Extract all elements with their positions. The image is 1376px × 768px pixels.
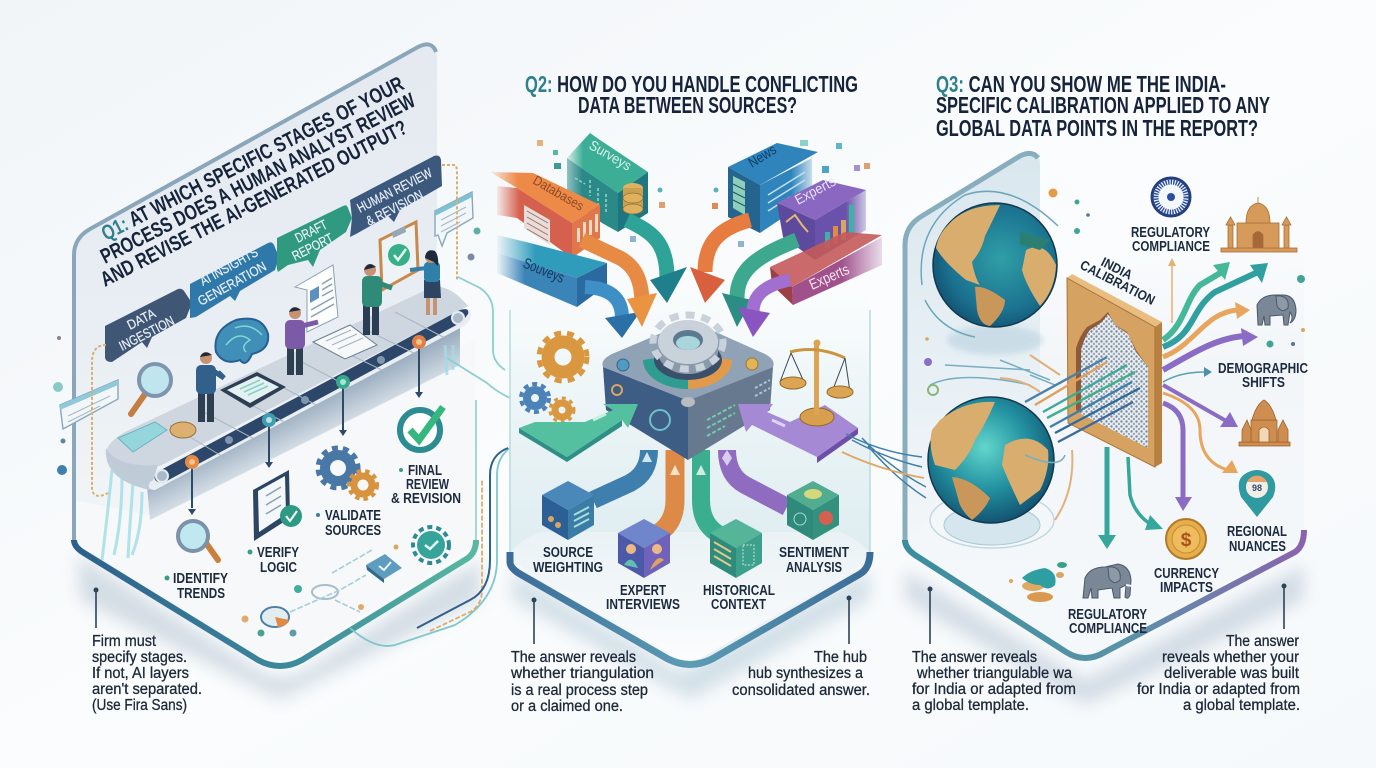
note: Q1: If not, AI layers (92, 665, 189, 682)
panel 2 wall (510, 290, 870, 658)
icon: dollar coin (1166, 519, 1206, 559)
icon: small orange gear (550, 398, 574, 422)
icon: elephant right (1257, 295, 1296, 325)
label: validate sources: VALIDATE (325, 508, 381, 524)
coin on belt (170, 422, 196, 438)
icon: verify checklist (253, 470, 302, 541)
icon: blue gear (521, 384, 549, 412)
side dots (53, 228, 480, 475)
label: regulatory compliance bottom: COMPLIANCE (1069, 621, 1147, 637)
icon: brain (215, 319, 268, 363)
icon: paper on belt (313, 325, 377, 359)
icon: coins and map (1022, 562, 1067, 602)
label: validate sources: SOURCES (325, 523, 381, 539)
stage tag: data ingestion (105, 289, 192, 362)
hub: synthesiser (602, 315, 774, 460)
note: Q1: specify stages. (92, 649, 187, 666)
source bar: souveys (497, 235, 607, 307)
teal circuit line (350, 442, 520, 646)
source bar: experts (770, 232, 882, 305)
hub gear (653, 315, 723, 374)
stage tag: AI insights generation: GENERATION (195, 259, 269, 309)
note: Q3 left (912, 649, 1076, 714)
panel 1 edge (74, 44, 436, 540)
note: Q2 left: The answer reveals (511, 649, 636, 666)
note: Q1: Firm must (92, 633, 157, 650)
icon: scale (780, 340, 853, 426)
note: Q3 left: a global template. (912, 697, 1029, 714)
chat bubble left (60, 380, 118, 429)
down arrow: orange (655, 450, 675, 535)
pedestal of globe bottom (930, 492, 1054, 548)
source bar: souveys: Souveys (521, 255, 567, 287)
leader: Q2 right note (846, 596, 852, 644)
note: Q3 right: reveals whether your (1162, 649, 1299, 666)
note: Q3 left: The answer reveals (912, 649, 1037, 666)
label: currency impacts: CURRENCY (1154, 566, 1219, 582)
label: regional nuances: REGIONAL (1227, 524, 1287, 540)
arrow: purple down (1163, 403, 1192, 511)
label: validate sources (316, 508, 381, 539)
down arrow: purple (727, 450, 787, 507)
hub ring (643, 358, 688, 389)
person: reviewer three (362, 264, 392, 335)
stage tag: AI insights generation (190, 242, 279, 318)
label: source weighting: WEIGHTING (533, 560, 603, 576)
heading Q1: Q1: AT WHICH SPECIFIC STAGES OF YOUR (98, 72, 408, 245)
arrow: orange out (1163, 302, 1250, 357)
icon: location pin: 98 (1252, 483, 1262, 493)
note: Q3 right: The answer (1226, 633, 1299, 650)
label: expert interviews (606, 583, 680, 613)
icon: tablet (220, 372, 286, 408)
label: historical context: HISTORICAL (703, 583, 775, 599)
label: final review: FINAL (408, 463, 442, 479)
connectors: panel 2 to 3 (846, 434, 926, 498)
icon: floor chip (366, 554, 402, 583)
arrow: teal surveys (627, 220, 687, 303)
panel 3 body (905, 240, 1304, 656)
icon: taj mahal (1221, 197, 1297, 252)
label: sentiment analysis: ANALYSIS (786, 560, 842, 576)
platform arrow: green (519, 404, 638, 462)
icon: orange gear (539, 333, 587, 381)
connector: orange (842, 452, 924, 478)
stage tag: data ingestion: DATA (125, 306, 158, 333)
label: sentiment analysis (779, 545, 849, 576)
note: Q1 (92, 633, 202, 714)
label: regulatory compliance top: COMPLIANCE (1132, 239, 1210, 255)
data tile on belt (118, 422, 167, 452)
panel: Q1 human review stages (53, 44, 520, 714)
arrow: teal down (1098, 447, 1116, 549)
calibration frame (1067, 274, 1162, 467)
arrow: green experts (722, 240, 797, 327)
label: identify trends: IDENTIFY (173, 571, 228, 587)
globe: top (933, 203, 1057, 327)
panel 3 wall (905, 152, 1040, 540)
small data squares (537, 140, 870, 247)
note: Q2 left: whether triangulation (510, 665, 654, 682)
label: demographic shifts: SHIFTS (1242, 375, 1285, 391)
source block: databases: Databases (530, 173, 587, 214)
arrow: teal curve (1128, 457, 1163, 530)
dark circuit line (417, 448, 508, 628)
stage tag: AI insights generation: AI INSIGHTS (197, 244, 260, 289)
label: currency impacts (1154, 566, 1219, 596)
label: expert interviews: EXPERT (620, 583, 666, 599)
pin: green (336, 375, 350, 436)
heading Q2: Q2: HOW DO YOU HANDLE CONFLICTING (525, 71, 858, 97)
arrow: purple experts (738, 280, 790, 337)
label: final review (391, 463, 461, 507)
note: Q2 right: hub synthesizes a (748, 665, 863, 682)
swoosh lines to globe (930, 360, 1065, 462)
note: Q3 left: for India or adapted from (912, 681, 1076, 698)
note: Q2 left: or a claimed one. (511, 698, 623, 715)
conveyor belt (106, 287, 471, 520)
person: analyst one (196, 352, 224, 422)
arrow: orange lower (1163, 393, 1238, 473)
panel: Q3 India calibration (842, 71, 1308, 714)
note: Q3 right: a global template. (1183, 697, 1300, 714)
icon: magnifier trends (178, 521, 218, 560)
floor ring and dots (242, 544, 398, 636)
icon: location pin (1239, 470, 1275, 517)
note: Q2 right: consolidated answer. (732, 682, 870, 699)
source block: databases (490, 172, 600, 258)
heading Q1: AND REVISE THE AI-GENERATED OUTPUT? (97, 116, 411, 291)
data streams (102, 345, 453, 560)
label: historical context: CONTEXT (711, 597, 766, 613)
orange circuit line (430, 480, 482, 631)
cube: historical context (710, 519, 762, 578)
label: regional nuances (1227, 524, 1287, 555)
source block: news (728, 141, 818, 233)
note: Q2 left (510, 649, 654, 715)
arrow: blue souveys (585, 287, 640, 338)
decorative dots (924, 188, 1305, 583)
label: final review: & REVISION (391, 491, 461, 507)
icon: ashoka chakra (1152, 178, 1190, 216)
label: India calibration: CALIBRATION (1078, 257, 1158, 308)
label: regulatory compliance bottom (1068, 607, 1147, 637)
label: source weighting (533, 545, 603, 576)
note: Q2 right: The hub (814, 649, 867, 666)
label: verify logic (248, 545, 299, 576)
icon: elephant bottom (1083, 564, 1138, 598)
note: Q1: aren't separated. (92, 681, 202, 698)
panel 1 rim (74, 540, 476, 666)
leader: Q1 note (94, 588, 98, 628)
arrow: purple lower (1163, 385, 1238, 427)
note: Q1: (Use Fira Sans) (92, 697, 187, 714)
source block: news: News (745, 141, 779, 171)
globe: bottom (928, 397, 1054, 523)
icon: gears (318, 448, 377, 499)
note: Q3 right: deliverable was built (1164, 665, 1300, 682)
panel 1 floor (74, 340, 475, 662)
panel 3 rim (905, 530, 1304, 658)
icon: document (295, 265, 338, 332)
floor connectors (290, 550, 372, 612)
leader: Q2 left note (532, 598, 536, 644)
up glyphs on arrows (642, 450, 732, 475)
stage tag: human review and revision: HUMAN REVIEW (355, 165, 435, 216)
person: analyst two (285, 307, 318, 375)
swoosh around globe top (921, 191, 1058, 337)
icon: floor pie (261, 607, 289, 627)
circuit lines upper right of panel (447, 277, 510, 398)
label: demographic shifts (1218, 361, 1308, 391)
note: Q2 right (732, 649, 870, 699)
label: identify trends: TRENDS (177, 586, 225, 602)
stage tag: human review and revision (350, 156, 442, 237)
label: regulatory compliance top (1131, 225, 1210, 255)
source block: experts: Experts (792, 173, 838, 208)
light beams through frame (1025, 357, 1140, 442)
heading Q3: GLOBAL DATA POINTS IN THE REPORT? (936, 115, 1258, 141)
source block: surveys: Surveys (586, 137, 634, 174)
pin: teal one (262, 413, 276, 468)
pin: orange right (412, 335, 426, 398)
label: verify logic: LOGIC (260, 560, 297, 576)
heading Q2 (525, 71, 858, 118)
arrow: purple out (1163, 328, 1258, 370)
label: regional nuances: NUANCES (1229, 539, 1286, 555)
swoosh orange (1000, 355, 1072, 520)
icon: magnifier (131, 364, 171, 414)
pin: orange left (185, 455, 199, 515)
panel 1 right edge (475, 400, 477, 540)
source block: surveys (567, 133, 648, 232)
platform arrow: purple (738, 404, 858, 463)
icon: dollar coin: $ (1181, 530, 1192, 551)
panel 3 edge (905, 153, 1038, 540)
stage tag: draft report: REPORT (290, 230, 336, 264)
note: Q2 left: is a real process step (511, 682, 648, 699)
leader: Q3 left note (928, 586, 932, 644)
panel: Q2 conflicting data (490, 71, 882, 715)
label: final review: REVIEW (406, 477, 449, 493)
down arrow: green (701, 450, 720, 535)
stage tag: human review and revision: & REVISION (364, 187, 426, 229)
icon: check badge (400, 407, 443, 450)
stage tag: data ingestion: INGESTION (117, 313, 177, 354)
panel 2 floor (510, 532, 870, 660)
note: Q3 left: whether triangulable wa (916, 665, 1072, 682)
label: sentiment analysis: SENTIMENT (779, 545, 849, 561)
panel 2 side edges (510, 310, 870, 552)
arrow: red news (690, 220, 750, 303)
arrow: orange databases (582, 240, 657, 327)
label: source weighting: SOURCE (543, 545, 593, 561)
label: demographic shifts: DEMOGRAPHIC (1218, 361, 1308, 377)
arrow: green out (1163, 262, 1230, 340)
panel 2 rim (510, 552, 870, 664)
source block: experts (777, 173, 866, 260)
label: regulatory compliance bottom: REGULATORY (1068, 607, 1147, 623)
leader: Q3 right note (1282, 584, 1286, 629)
stage tag: draft report (277, 205, 352, 272)
heading Q1: PROCESS DOES A HUMAN ANALYST REVIEW (97, 89, 419, 268)
panel 1 wall (74, 44, 437, 540)
heading Q3: Q3: CAN YOU SHOW ME THE INDIA- (936, 71, 1226, 97)
arrow: thin orange up (1168, 258, 1176, 323)
note: Q3 right: for India or adapted from (1137, 681, 1300, 698)
note: Q3 right (1137, 633, 1300, 714)
down arrow: blue (593, 450, 649, 500)
heading Q2: DATA BETWEEN SOURCES? (578, 92, 797, 118)
icon: clipboard (380, 222, 418, 290)
label: historical context (703, 583, 775, 613)
label: verify logic: VERIFY (257, 545, 299, 561)
label: regulatory compliance top: REGULATORY (1131, 225, 1210, 241)
heading Q3 (936, 71, 1270, 141)
globe shadow top (947, 325, 1043, 355)
person: reviewer four (410, 250, 441, 315)
source bar: experts: Experts (807, 261, 852, 294)
arrow: thin teal (1163, 367, 1212, 382)
stage tag: draft report: DRAFT (293, 217, 330, 246)
cube: expert interviews (618, 519, 670, 578)
cube: sentiment analysis (787, 481, 839, 540)
chat bubble right (435, 192, 473, 246)
label: currency impacts: IMPACTS (1160, 580, 1213, 596)
icon: temple (1239, 400, 1290, 446)
label: expert interviews: INTERVIEWS (606, 597, 680, 613)
label: identify trends (164, 571, 228, 602)
label: India calibration: INDIA (1099, 254, 1135, 283)
dotted connectors (92, 165, 457, 496)
icon: floor teal gear (413, 527, 449, 563)
arrow: teal out (1163, 263, 1268, 347)
cube: source weighting (542, 481, 594, 540)
